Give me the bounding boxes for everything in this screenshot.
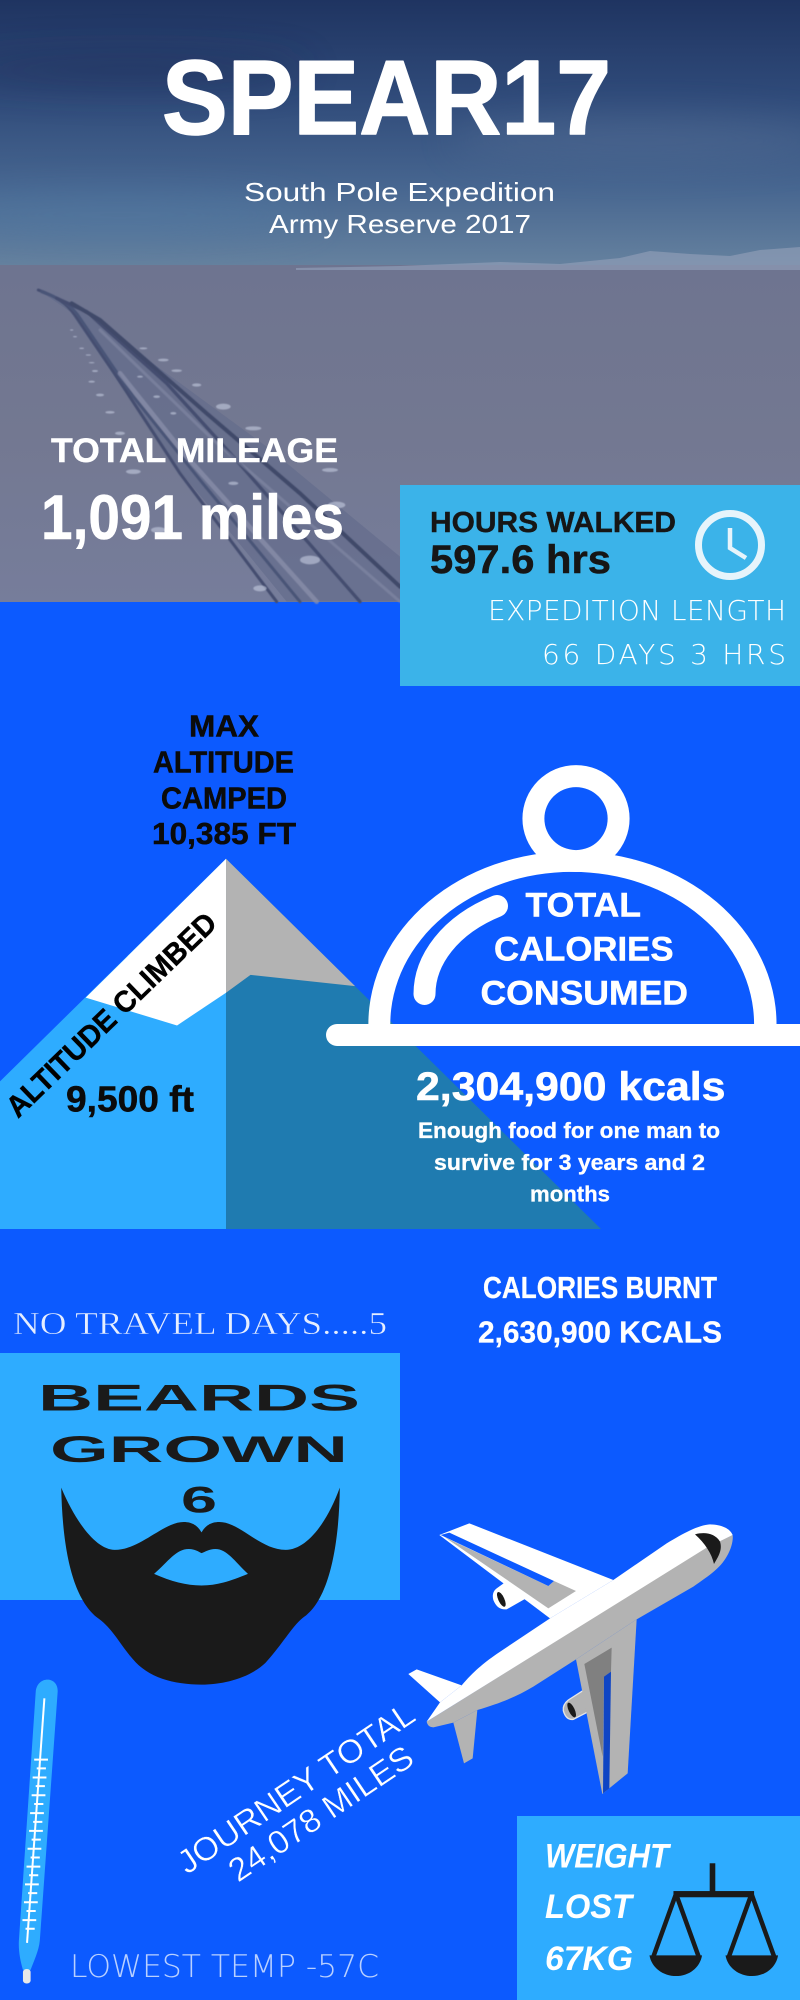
- weight lost text: WEIGHT: [545, 1838, 672, 1876]
- weight lost text: 67KG: [545, 1940, 633, 1978]
- stat: lowest temperature: LOWEST TEMP -57C: [70, 1949, 379, 1985]
- stat: calories burnt: 2,630,900 KCALS: [478, 1314, 722, 1350]
- rotated label: altitude climbed: ALTITUDE CLIMBED: [0, 906, 224, 1124]
- stat: calories burnt: CALORIES BURNT: [483, 1270, 717, 1305]
- icon: beard: [61, 1488, 340, 1685]
- heading: total calories consumed: TOTAL: [526, 886, 641, 924]
- stat: total mileage: 1,091 miles: [41, 483, 344, 553]
- expedition length: EXPEDITION LENGTH: [488, 594, 786, 627]
- panel: hours walked and expedition length: [400, 485, 800, 686]
- subtitle: Army Reserve 2017: [269, 209, 531, 239]
- heading: max altitude camped: CAMPED: [161, 780, 287, 816]
- expedition duration: 66 DAYS 3 HRS: [542, 638, 786, 671]
- heading: max altitude camped: MAX: [189, 708, 259, 744]
- stat: altitude value: 9,500 ft: [66, 1078, 194, 1120]
- note: food comparison: months: [530, 1182, 610, 1206]
- note: food comparison: survive for 3 years and 2: [434, 1150, 705, 1175]
- icon: clock: [698, 514, 762, 576]
- heading: max altitude camped: 10,385 FT: [152, 816, 296, 851]
- heading: total calories consumed: [480, 886, 688, 1012]
- weight lost text: LOST: [545, 1888, 635, 1926]
- rotated label: journey total: JOURNEY TOTAL: [170, 1695, 421, 1881]
- panel: hero photo of snow tracks: [0, 0, 800, 602]
- subtitle: [244, 177, 555, 239]
- note: food comparison: [418, 1118, 720, 1206]
- panel: weight lost: [517, 1816, 800, 2000]
- beards heading: GROWN: [50, 1429, 348, 1470]
- rotated label: journey total: 24,078 MILES: [221, 1738, 420, 1889]
- heading: total calories consumed: CONSUMED: [480, 974, 688, 1012]
- subtitle: South Pole Expedition: [244, 177, 555, 207]
- stat: total mileage: [41, 432, 344, 553]
- stat: calories burnt: [478, 1270, 722, 1350]
- heading: total calories consumed: CALORIES: [494, 930, 674, 968]
- beards heading: 6: [181, 1480, 217, 1520]
- heading: max altitude camped: ALTITUDE: [153, 744, 294, 780]
- heading: max altitude camped: [152, 708, 296, 851]
- icon: thermometer: [19, 1680, 58, 1984]
- weight lost text: [545, 1838, 672, 1978]
- beards heading: [38, 1378, 360, 1520]
- hours value: 597.6 hrs: [430, 538, 611, 582]
- hours walked: HOURS WALKED: [430, 507, 676, 539]
- title: SPEAR17: [162, 39, 611, 157]
- note: food comparison: Enough food for one man to: [418, 1118, 720, 1143]
- icon: food cloche: [326, 765, 800, 1046]
- icon: airplane: [408, 1523, 733, 1794]
- panel: beards grown: [0, 1353, 400, 1685]
- stat: no travel days: NO TRAVEL DAYS.....5: [13, 1305, 387, 1341]
- icon: mountain: [0, 859, 601, 1229]
- beards heading: BEARDS: [38, 1378, 360, 1418]
- icon: balance scales: [649, 1863, 778, 1976]
- stat: calories consumed: 2,304,900 kcals: [416, 1065, 726, 1109]
- stat: total mileage: TOTAL MILEAGE: [51, 432, 338, 470]
